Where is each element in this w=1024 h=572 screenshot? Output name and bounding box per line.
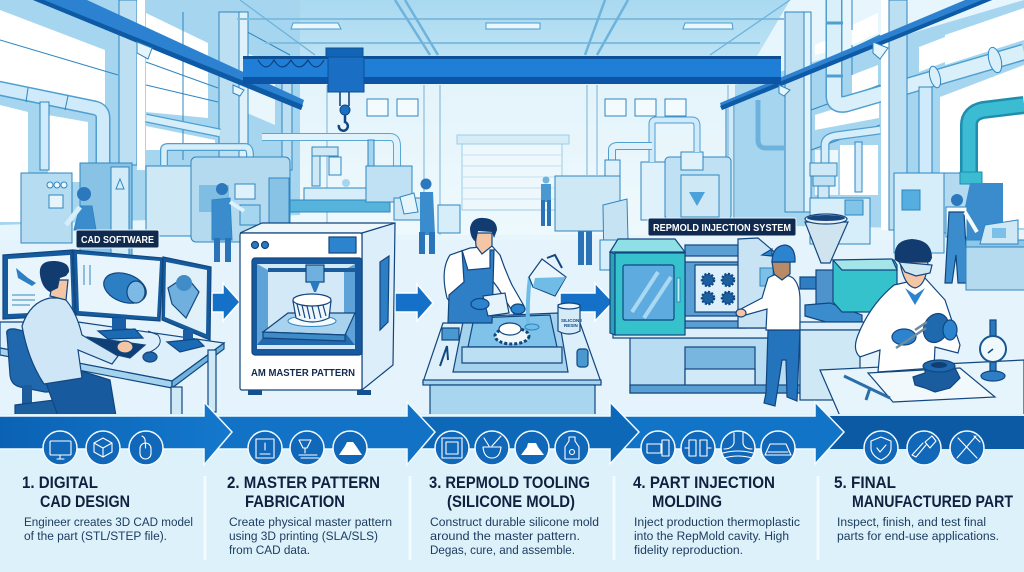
- step 1 text: [22, 473, 193, 543]
- icons: step 2: [248, 431, 367, 465]
- keyboard and mouse: [87, 331, 160, 362]
- printer side window: [380, 256, 389, 330]
- worker at lathe: [212, 183, 244, 262]
- step 3 text: around the master pattern.: [430, 529, 580, 543]
- far workers in the centre: [541, 176, 592, 265]
- part in hand and gloves: [892, 309, 957, 348]
- arrow: tooling to injection: [560, 283, 613, 321]
- step 2 text: [227, 473, 392, 557]
- right rail: [720, 0, 992, 110]
- right rear worker and console: [945, 194, 1024, 290]
- left worker: [66, 187, 96, 230]
- background lathe machine: [146, 157, 390, 242]
- step 2 text: 2. MASTER PATTERN: [227, 473, 380, 492]
- teal pipe: [969, 105, 1024, 175]
- floor: [0, 240, 1024, 416]
- station 5: inspection: [800, 239, 1024, 416]
- icons: step 4: [641, 431, 795, 465]
- label: AM MASTER PATTERN: AM MASTER PATTERN: [251, 368, 355, 379]
- machine operator: [736, 245, 800, 406]
- back wall: [290, 84, 735, 235]
- arrow: printer to tooling: [395, 284, 433, 321]
- step 2 text: Create physical master pattern: [229, 515, 392, 529]
- step 1 text: 1. DIGITAL: [22, 473, 98, 492]
- icons: step 3: [435, 431, 589, 465]
- ceiling: [240, 0, 790, 85]
- machine base: [613, 328, 825, 393]
- step 2 text: using 3D printing (SLA/SLS): [229, 529, 378, 543]
- flow arrows between stations: [212, 283, 613, 321]
- printer buttons: [252, 242, 268, 248]
- caliper: [844, 376, 890, 400]
- CAD part renders: [100, 267, 150, 309]
- step 4 text: into the RepMold cavity. High: [634, 529, 789, 543]
- engineer head: [40, 261, 69, 300]
- mold box: [453, 313, 568, 372]
- crane girder: [243, 56, 781, 84]
- left rail: [33, 0, 304, 110]
- step 3 text: Degas, cure, and assemble.: [430, 543, 575, 557]
- injection unit: [800, 214, 897, 322]
- master part in mold: [495, 323, 529, 344]
- silicone resin can: [558, 303, 582, 334]
- pouring stream: [528, 277, 530, 327]
- crane hook: [340, 92, 349, 106]
- step 4 text: MOLDING: [652, 492, 722, 511]
- step 4 text: 4. PART INJECTION: [633, 473, 775, 492]
- printer chamber: [252, 258, 362, 355]
- step 3 text: [429, 473, 599, 557]
- engineer shirt: [22, 298, 118, 384]
- tools on bench: [440, 328, 588, 367]
- station 3: silicone mold tooling: [423, 218, 601, 415]
- right pillar: [881, 0, 907, 230]
- step 4 text: Inject production thermoplastic: [634, 515, 800, 529]
- bench: [423, 323, 601, 415]
- right side wall: [726, 0, 1024, 235]
- step 4 text: fidelity reproduction.: [634, 543, 743, 557]
- label: REPMOLD INJECTION SYSTEM: [648, 218, 796, 236]
- ceiling trusses and lights: [237, 0, 790, 55]
- banner segment 3: [410, 402, 639, 464]
- process banner: [0, 402, 1024, 465]
- right pipes: [758, 0, 1024, 230]
- bottom information panel: [0, 402, 1024, 572]
- crane trolley: [326, 48, 363, 57]
- icons: step 1: [43, 431, 163, 465]
- factory background scene: [0, 0, 1024, 416]
- step 3 text: 3. REPMOLD TOOLING: [429, 473, 590, 492]
- overhead rails and crane: [33, 0, 992, 131]
- banner segment 2: [205, 402, 435, 465]
- silicone resin can: RESIN: [564, 323, 578, 328]
- blueprint: [868, 368, 995, 402]
- back machines centre right: [555, 120, 731, 270]
- monitors: [3, 250, 211, 352]
- label: CAD SOFTWARE: [76, 230, 159, 248]
- banner segment 4: [612, 402, 844, 464]
- station 1: CAD workstation: [0, 250, 224, 417]
- silicone resin can: SILICONE: [561, 318, 582, 323]
- step 4 text: [633, 473, 800, 557]
- background machines and workers: [21, 120, 1024, 290]
- clamp and mold area: [685, 238, 778, 328]
- mold worker: [444, 218, 525, 323]
- desk: [0, 322, 224, 417]
- step 1 text: of the part (STL/STEP file).: [24, 529, 167, 543]
- worker by console: [419, 178, 435, 254]
- step 1 text: Engineer creates 3D CAD model: [24, 515, 193, 529]
- dividers: [205, 476, 818, 560]
- step 3 text: (SILICONE MOLD): [447, 492, 575, 511]
- step 5 text: parts for end-use applications.: [837, 529, 999, 543]
- step 5 text: [834, 473, 1014, 543]
- station 4: injection molding machine: [610, 214, 897, 406]
- banner segment 5: [830, 416, 1024, 449]
- printer display: [329, 237, 356, 253]
- label: REPMOLD INJECTION SYSTEM: REPMOLD INJECTION SYSTEM: [653, 222, 791, 234]
- step 2 text: FABRICATION: [245, 492, 345, 511]
- back wall details and roller door: [327, 85, 728, 235]
- engineer hand: [117, 341, 133, 353]
- back machines centre left: [304, 147, 460, 233]
- arrow: CAD to printer: [212, 283, 240, 321]
- left control cabinets: [21, 163, 132, 258]
- trousers: [42, 370, 116, 416]
- station 2: 3D printer: [240, 223, 395, 395]
- step 1 text: CAD DESIGN: [40, 492, 130, 511]
- left side wall: [0, 0, 300, 225]
- step 3 text: Construct durable silicone mold: [430, 515, 599, 529]
- step 5 text: Inspect, finish, and test final: [837, 515, 986, 529]
- pouring jug: [529, 255, 566, 296]
- icons: step 5: [864, 431, 984, 465]
- label: CAD SOFTWARE: CAD SOFTWARE: [81, 234, 154, 246]
- teal clamp housing: [610, 239, 685, 335]
- black gear part: [913, 360, 960, 392]
- step 2 text: from CAD data.: [229, 543, 310, 557]
- left pipes: [0, 88, 397, 170]
- scientist coat: [855, 278, 960, 372]
- step 5 text: 5. FINAL: [834, 473, 896, 492]
- inspection table: [800, 322, 1024, 416]
- chair: [7, 329, 85, 416]
- banner segment 1: [0, 402, 232, 465]
- right background machines: [810, 163, 1003, 253]
- scientist head: [895, 239, 932, 305]
- pressure gauge: [980, 320, 1006, 381]
